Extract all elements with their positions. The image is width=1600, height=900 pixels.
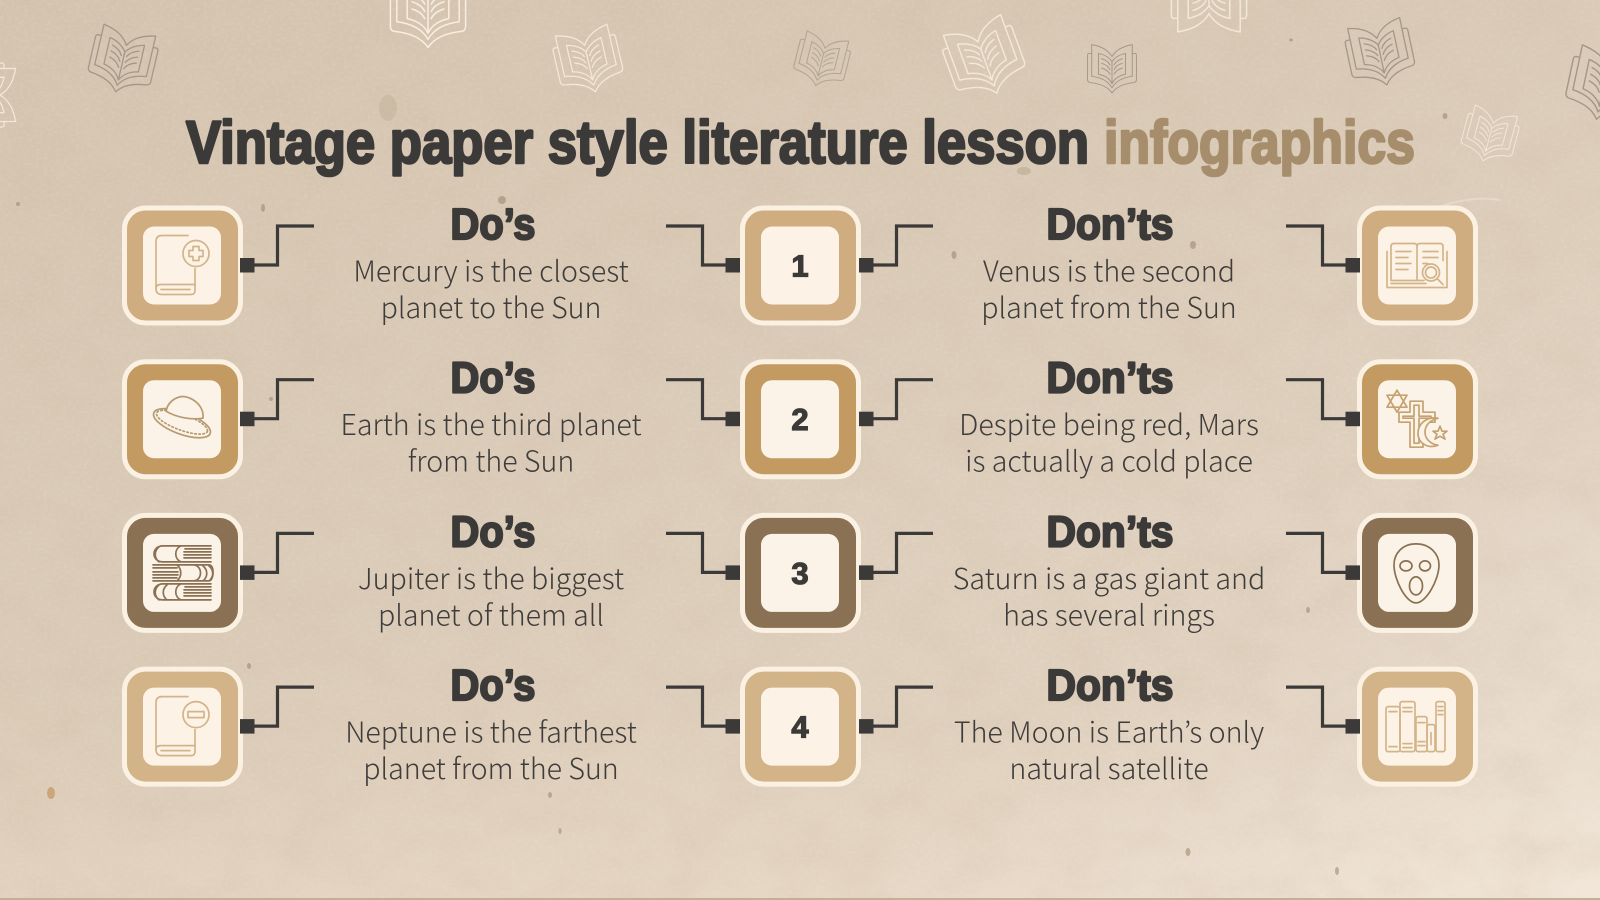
card: number 3: 3 [791, 556, 809, 591]
text: dont 4 [954, 661, 1264, 788]
text: do 1: Mercury is the closest [353, 250, 629, 290]
text: dont 2: Despite being red, Mars [959, 403, 1259, 444]
connector [859, 226, 933, 272]
text: do 4: Do’s [450, 661, 536, 710]
text: do 2 [340, 354, 642, 481]
text: dont 1: Don’ts [1046, 200, 1174, 249]
text: dont 2: is actually a cold place [965, 440, 1253, 481]
text: dont 1 [981, 200, 1237, 327]
connector [666, 226, 740, 272]
connector [666, 380, 740, 426]
row 2 [124, 354, 1476, 481]
connector [666, 687, 740, 734]
text: do 2: Do’s [450, 354, 536, 403]
connector [240, 380, 314, 426]
card: number 2: 2 [791, 402, 809, 437]
text: do 3: planet of them all [378, 593, 604, 634]
title: infographics [1104, 109, 1415, 176]
card: stacked books icon [124, 515, 240, 630]
decorative book: left edge cream [0, 63, 16, 127]
connector [1286, 533, 1360, 580]
decorative book: top centre-left cream [390, 0, 466, 47]
connector [1286, 380, 1360, 426]
text: do 3 [358, 507, 624, 634]
connector [1286, 226, 1360, 272]
connector [666, 533, 740, 580]
decorative book: large cream tilted [938, 12, 1031, 106]
decorative book: right edge grey [1562, 44, 1600, 127]
card: number 1: 1 [791, 248, 809, 284]
card: hat icon [124, 362, 240, 477]
text: dont 3 [953, 507, 1265, 634]
text: dont 1: Venus is the second [983, 250, 1235, 290]
text: dont 2 [959, 354, 1259, 481]
text: do 3: Do’s [450, 507, 536, 556]
card: number 2 [742, 362, 858, 477]
card: number 4: 4 [791, 710, 809, 745]
decorative book: cream tilted [550, 23, 626, 99]
text: do 1: planet to the Sun [381, 286, 601, 327]
decorative book: top left grey [85, 23, 161, 99]
card: scream mask icon [1360, 515, 1476, 630]
text: do 3: Jupiter is the biggest [358, 557, 624, 598]
text: dont 2: Don’ts [1046, 354, 1174, 403]
text: dont 3: Saturn is a gas giant and [953, 557, 1265, 598]
decorative book: right cream [1458, 104, 1522, 168]
text: dont 1: planet from the Sun [981, 286, 1237, 327]
text: do 2: Earth is the third planet [340, 403, 642, 444]
text: do 4: planet from the Sun [363, 747, 619, 788]
text: do 2: from the Sun [408, 440, 574, 481]
connector [859, 687, 933, 734]
connector [240, 533, 314, 580]
card: book minus icon [124, 669, 240, 784]
text: dont 3: has several rings [1003, 593, 1215, 634]
text: do 4 [345, 661, 637, 788]
decorative book: small grey [791, 30, 853, 92]
text: do 1 [353, 200, 629, 327]
connector [859, 380, 933, 426]
connector [240, 687, 314, 734]
decorative book: grey top right [1342, 16, 1418, 92]
text: do 1: Do’s [450, 200, 536, 249]
connector [859, 533, 933, 580]
card: number 1 [742, 208, 858, 323]
decorative book: grey upright [1088, 45, 1136, 93]
card: book plus icon [124, 208, 240, 323]
card: number 3 [742, 515, 858, 630]
card: open book search icon [1360, 208, 1476, 323]
title: Vintage paper style literature lesson [186, 109, 1089, 176]
card: number 4 [742, 669, 858, 784]
row 3 [124, 507, 1476, 634]
text: dont 4: natural satellite [1009, 747, 1209, 788]
card: religion symbols icon [1360, 362, 1476, 477]
row 1 [124, 200, 1476, 327]
connector [1286, 687, 1360, 734]
connector [240, 226, 314, 272]
row 4 [124, 661, 1476, 788]
card: bookshelf icon [1360, 669, 1476, 784]
text: do 4: Neptune is the farthest [345, 711, 637, 752]
text: dont 3: Don’ts [1046, 507, 1174, 556]
decorative book: upside-down cream [1171, 0, 1247, 32]
text: dont 4: Don’ts [1046, 661, 1174, 710]
text: dont 4: The Moon is Earth’s only [954, 711, 1264, 752]
